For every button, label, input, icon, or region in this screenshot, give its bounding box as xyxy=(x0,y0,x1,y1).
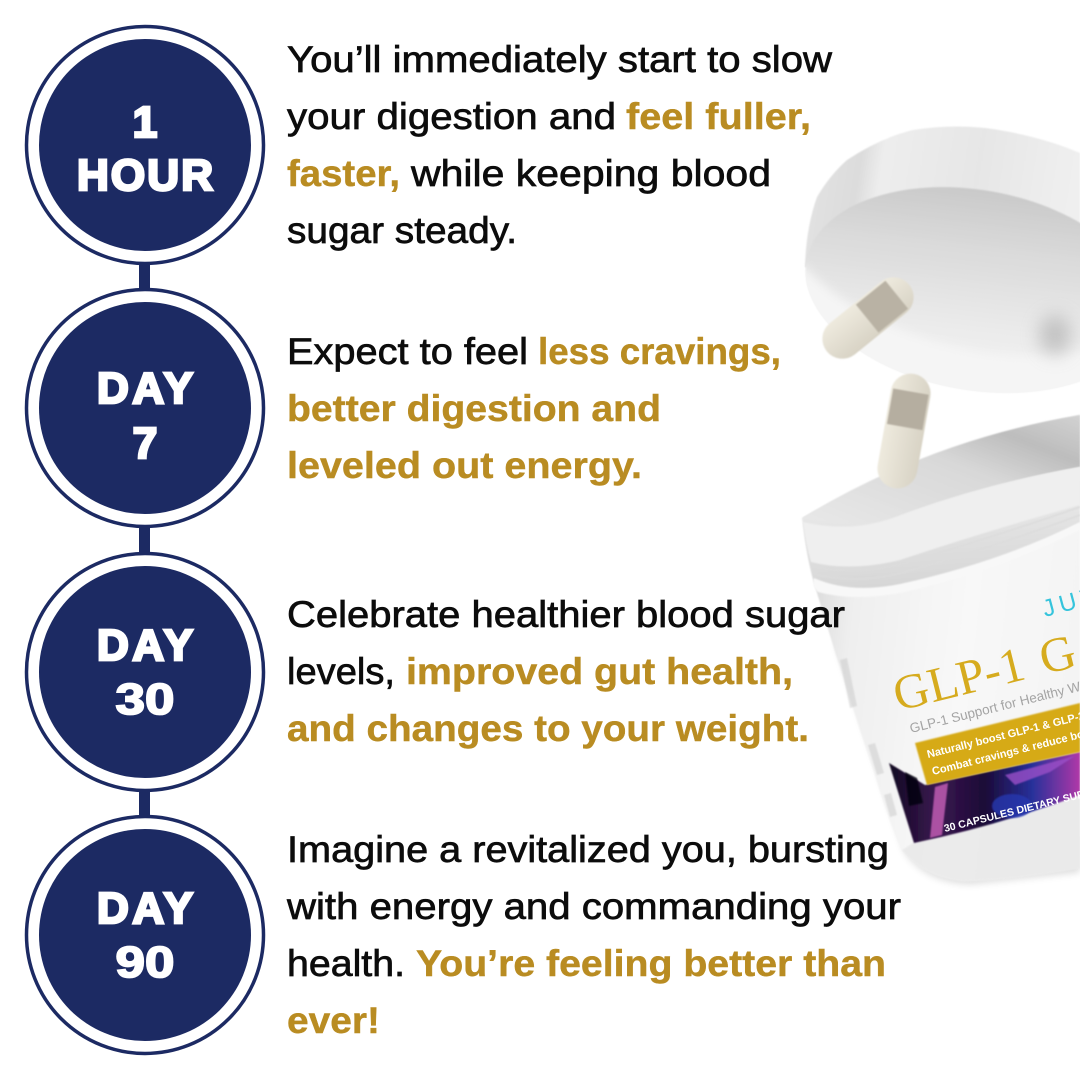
jar collar xyxy=(813,522,1080,597)
lid outer wall xyxy=(805,126,1080,300)
step badge: day 90: DAY xyxy=(97,884,193,933)
text block: day 7: better digestion and xyxy=(287,388,661,429)
text block: 1 hour xyxy=(287,39,832,251)
step badge: day 30 xyxy=(26,554,264,790)
step badge: 1 hour: 1 xyxy=(133,98,157,147)
capsule powder band xyxy=(887,388,929,430)
step badge: day 30: 30 xyxy=(116,675,174,724)
lid shadow xyxy=(1039,315,1071,355)
text block: day 7: less cravings, xyxy=(538,331,781,372)
text block: day 90: health. xyxy=(287,943,405,984)
text block: 1 hour: sugar steady. xyxy=(287,210,517,251)
text block: 1 hour: your digestion and xyxy=(287,96,616,137)
step badge: day 7: DAY xyxy=(97,364,193,413)
step badge: day 90: 90 xyxy=(116,938,174,987)
step badge: 1 hour xyxy=(26,26,264,264)
art highlights xyxy=(905,756,1075,838)
text block: day 90: You’re feeling better than xyxy=(416,943,886,984)
text block: day 7: leveled out energy. xyxy=(287,445,642,486)
jar neck ridges xyxy=(812,507,1080,579)
capsule powder band xyxy=(856,281,908,333)
text block: day 90: Imagine a revitalized you, bursting xyxy=(287,829,889,870)
text block: 1 hour: You’ll immediately start to slow xyxy=(287,39,832,80)
text block: day 90 xyxy=(286,829,901,1041)
product: jar lid xyxy=(804,126,1080,393)
text block: day 30 xyxy=(287,594,845,749)
text block: 1 hour: while keeping blood xyxy=(410,153,771,194)
jar shadow xyxy=(835,640,1080,884)
jar neck xyxy=(802,415,1080,590)
jar inner wall xyxy=(803,467,1080,567)
step badge: 1 hour: HOUR xyxy=(77,151,213,200)
jar side text xyxy=(840,658,897,817)
capsule lower xyxy=(874,370,934,492)
text block: 1 hour: faster, xyxy=(287,153,400,194)
text block: day 90: with energy and commanding your xyxy=(286,886,901,927)
text block: day 7 xyxy=(287,331,781,486)
timeline connector xyxy=(139,145,150,935)
step badge: day 30: DAY xyxy=(97,621,193,670)
jar opening xyxy=(802,415,1080,524)
text block: 1 hour: feel fuller, xyxy=(626,96,811,137)
jar label art xyxy=(889,752,1080,843)
jar body xyxy=(814,523,1080,881)
text block: day 30: and changes to your weight. xyxy=(287,708,809,749)
text block: day 30: levels, xyxy=(287,651,395,692)
jar product name: GLP-1 G xyxy=(887,623,1080,722)
lid underside xyxy=(789,162,1080,418)
text block: day 90: ever! xyxy=(287,1000,380,1041)
jar gold band xyxy=(915,703,1080,785)
product: open supplement jar xyxy=(802,415,1080,884)
text block: day 7: Expect to feel xyxy=(287,331,528,372)
step badge: day 90 xyxy=(26,816,264,1054)
capsule upper xyxy=(814,269,922,367)
step badge: day 7 xyxy=(26,290,264,526)
text block: day 30: improved gut health, xyxy=(406,651,793,692)
step badge: day 7: 7 xyxy=(133,419,157,468)
text block: day 30: Celebrate healthier blood sugar xyxy=(287,594,845,635)
lid lower lip xyxy=(806,270,848,322)
jar base shading xyxy=(902,795,1080,881)
